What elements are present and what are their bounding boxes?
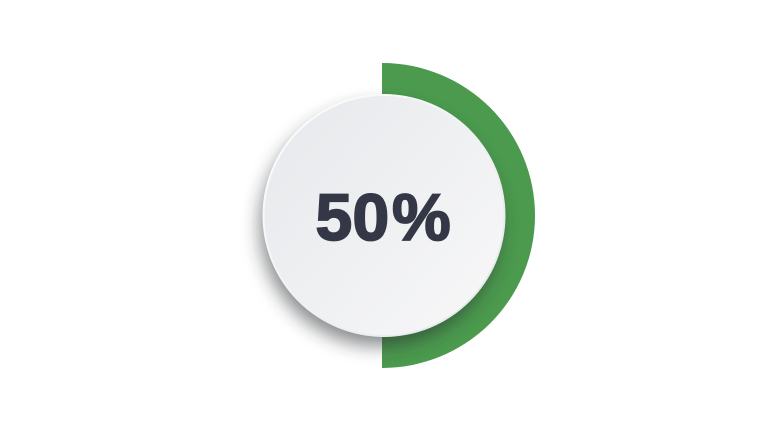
percentage value: 50% — [316, 180, 451, 254]
progress ring: green half arc — [382, 63, 535, 368]
dial disc with drop shadow — [260, 94, 506, 346]
infographic: 50 percent progress dial — [247, 63, 535, 368]
